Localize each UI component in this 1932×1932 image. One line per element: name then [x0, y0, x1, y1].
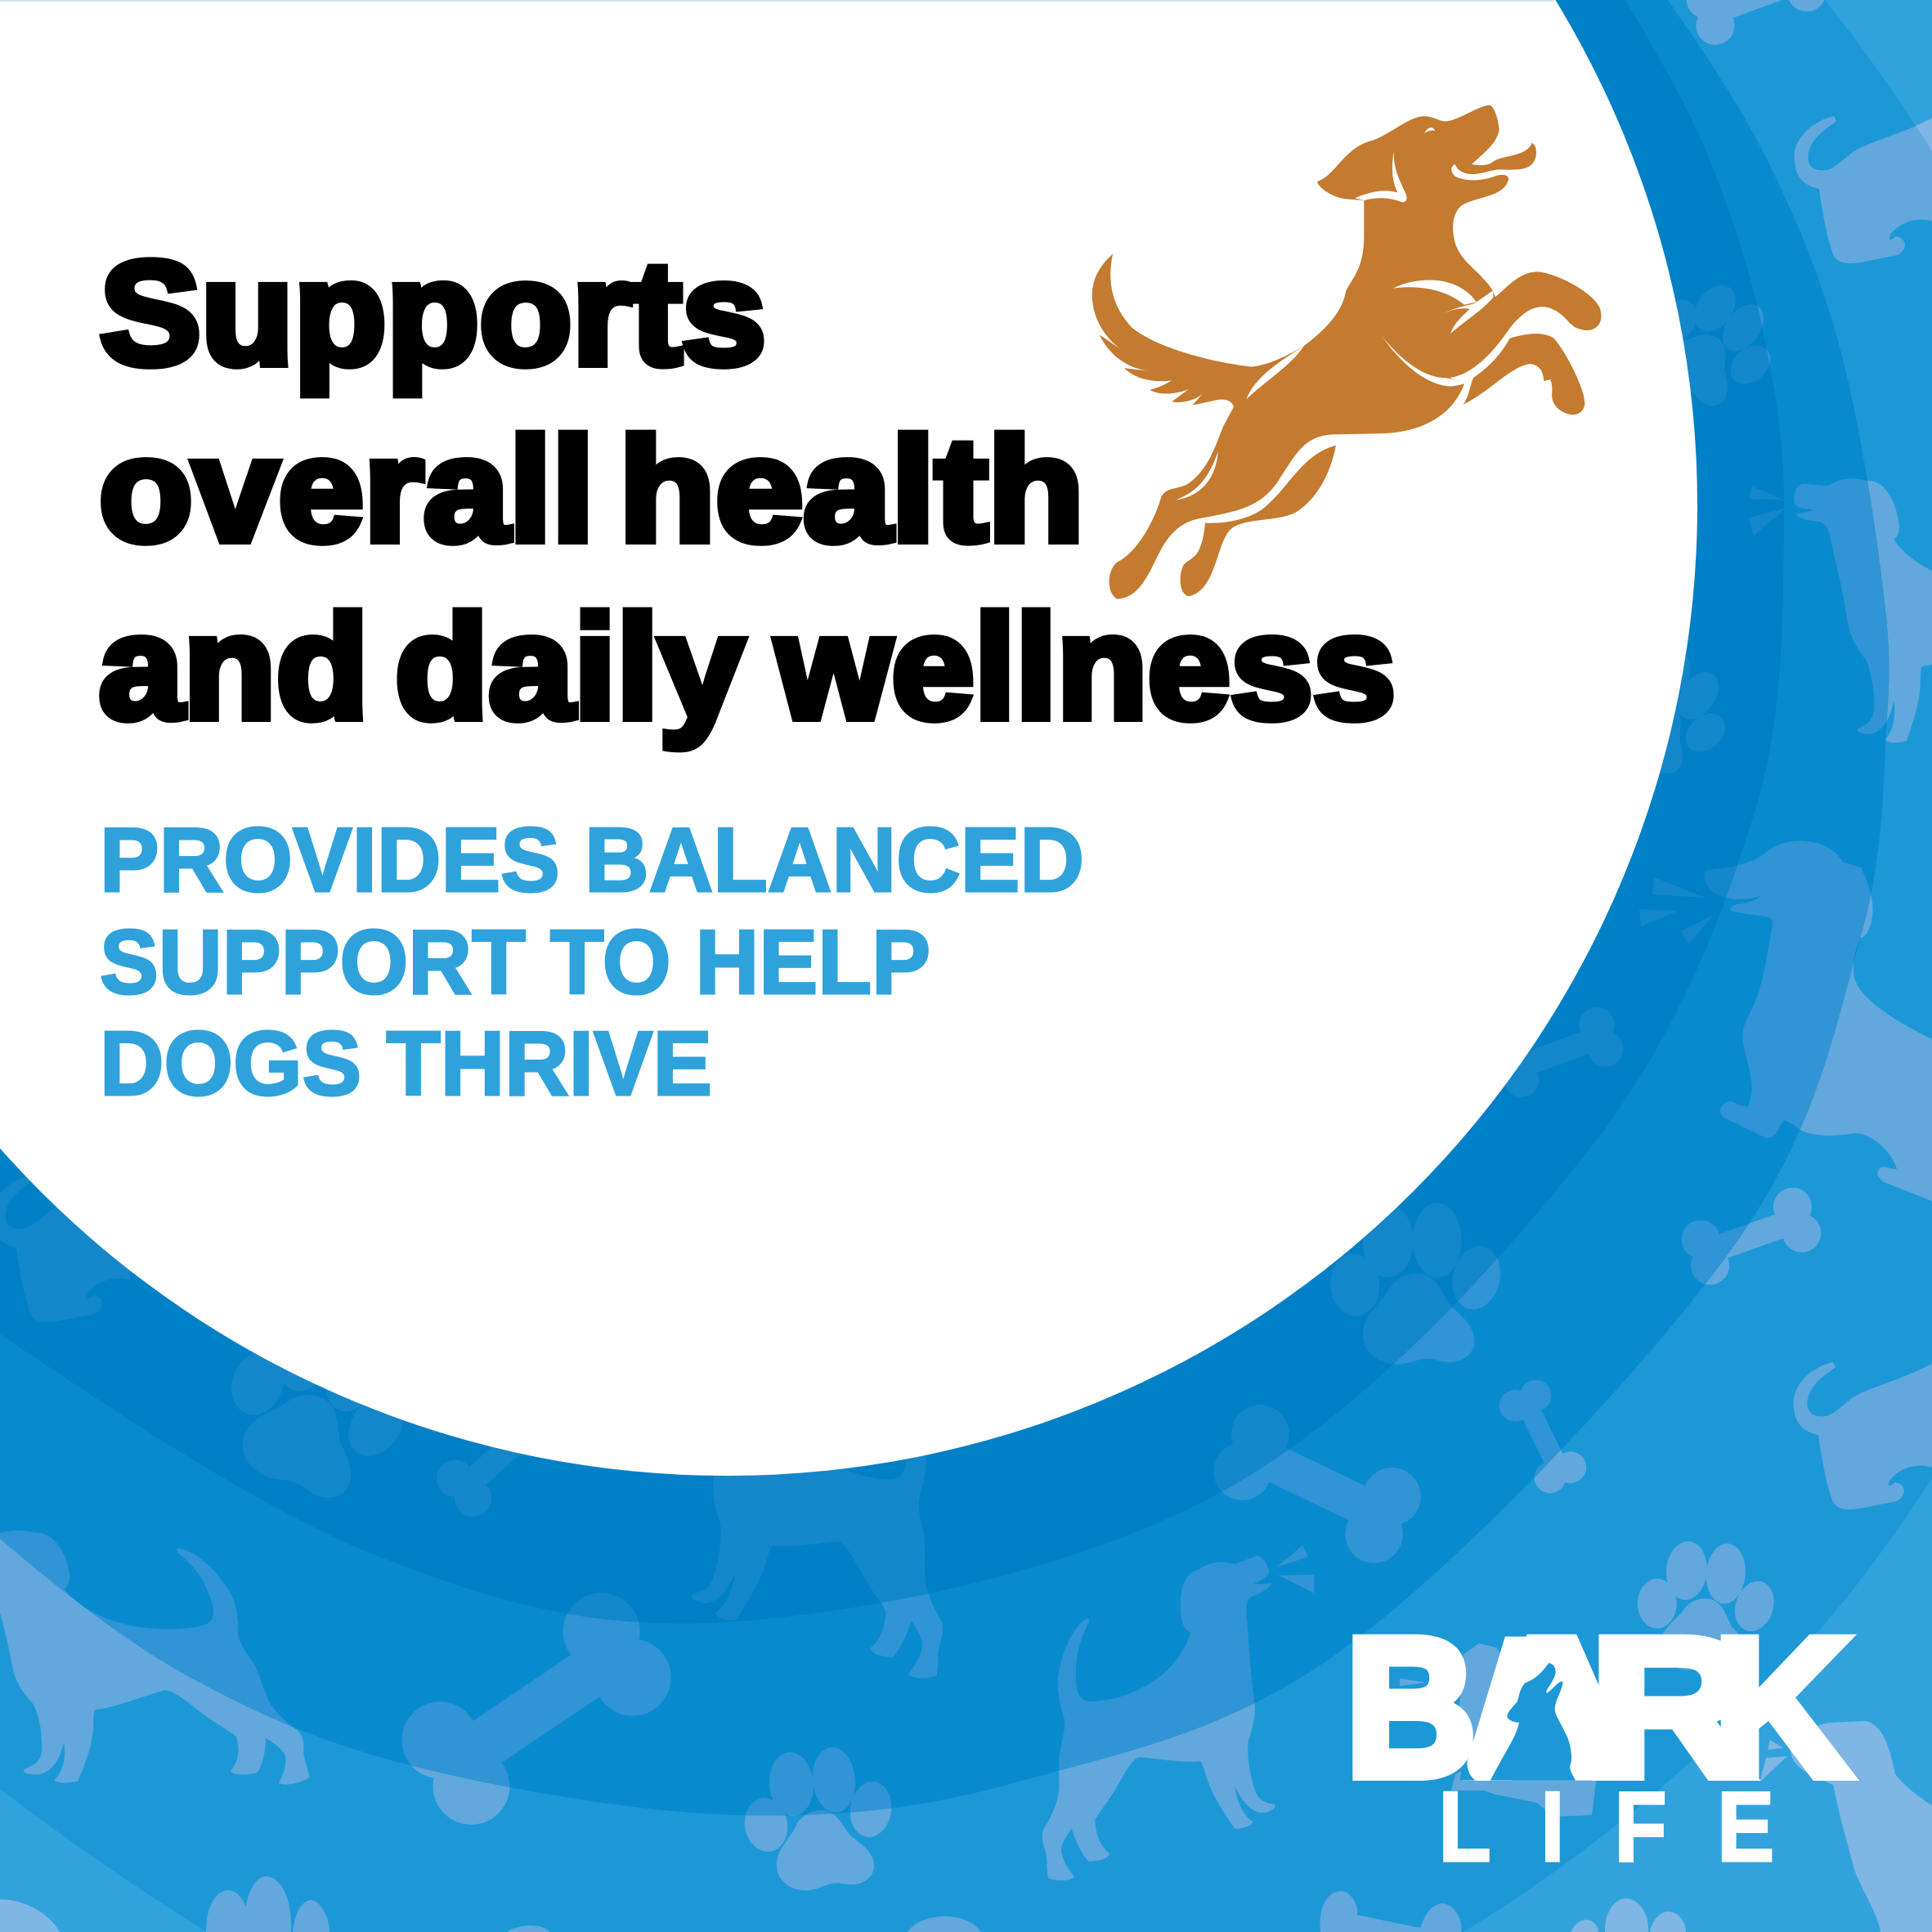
hind far leg [1181, 446, 1336, 596]
heading: wellness [775, 585, 1396, 750]
heading: Supports [100, 231, 766, 396]
icon: leaping orange dog [1092, 105, 1601, 599]
logo word LIFE: LIFE [1439, 1772, 1774, 1883]
inner dark ring [0, 0, 1784, 1624]
logo word BARK: A [1467, 1598, 1637, 1818]
logo word BARK: K [1714, 1598, 1849, 1817]
heading [99, 231, 1396, 750]
second ring silhouettes [0, 306, 1889, 1815]
heading: health [619, 408, 1084, 572]
heading: overall [99, 408, 594, 572]
logo word BARK [1346, 1597, 1849, 1818]
logo A flat-top fill [1461, 1637, 1601, 1781]
subheading [100, 809, 1084, 1114]
inner ring silhouettes [0, 285, 1843, 1780]
white circle panel [0, 0, 1697, 1476]
subheading: SUPPORT TO HELP [100, 912, 930, 1013]
subheading: PROVIDES BALANCED [100, 809, 1084, 911]
subheading: DOGS THRIVE [100, 1013, 712, 1114]
logo word BARK: B [1346, 1597, 1476, 1817]
heading: daily [395, 585, 744, 750]
logo word BARK: R [1590, 1598, 1753, 1817]
heading: and [99, 585, 369, 750]
logo dog cut-out [1460, 1663, 1576, 1781]
logo: BARK LIFE [1346, 1597, 1849, 1883]
dog white details [1176, 128, 1494, 500]
front lower leg [1464, 334, 1585, 415]
